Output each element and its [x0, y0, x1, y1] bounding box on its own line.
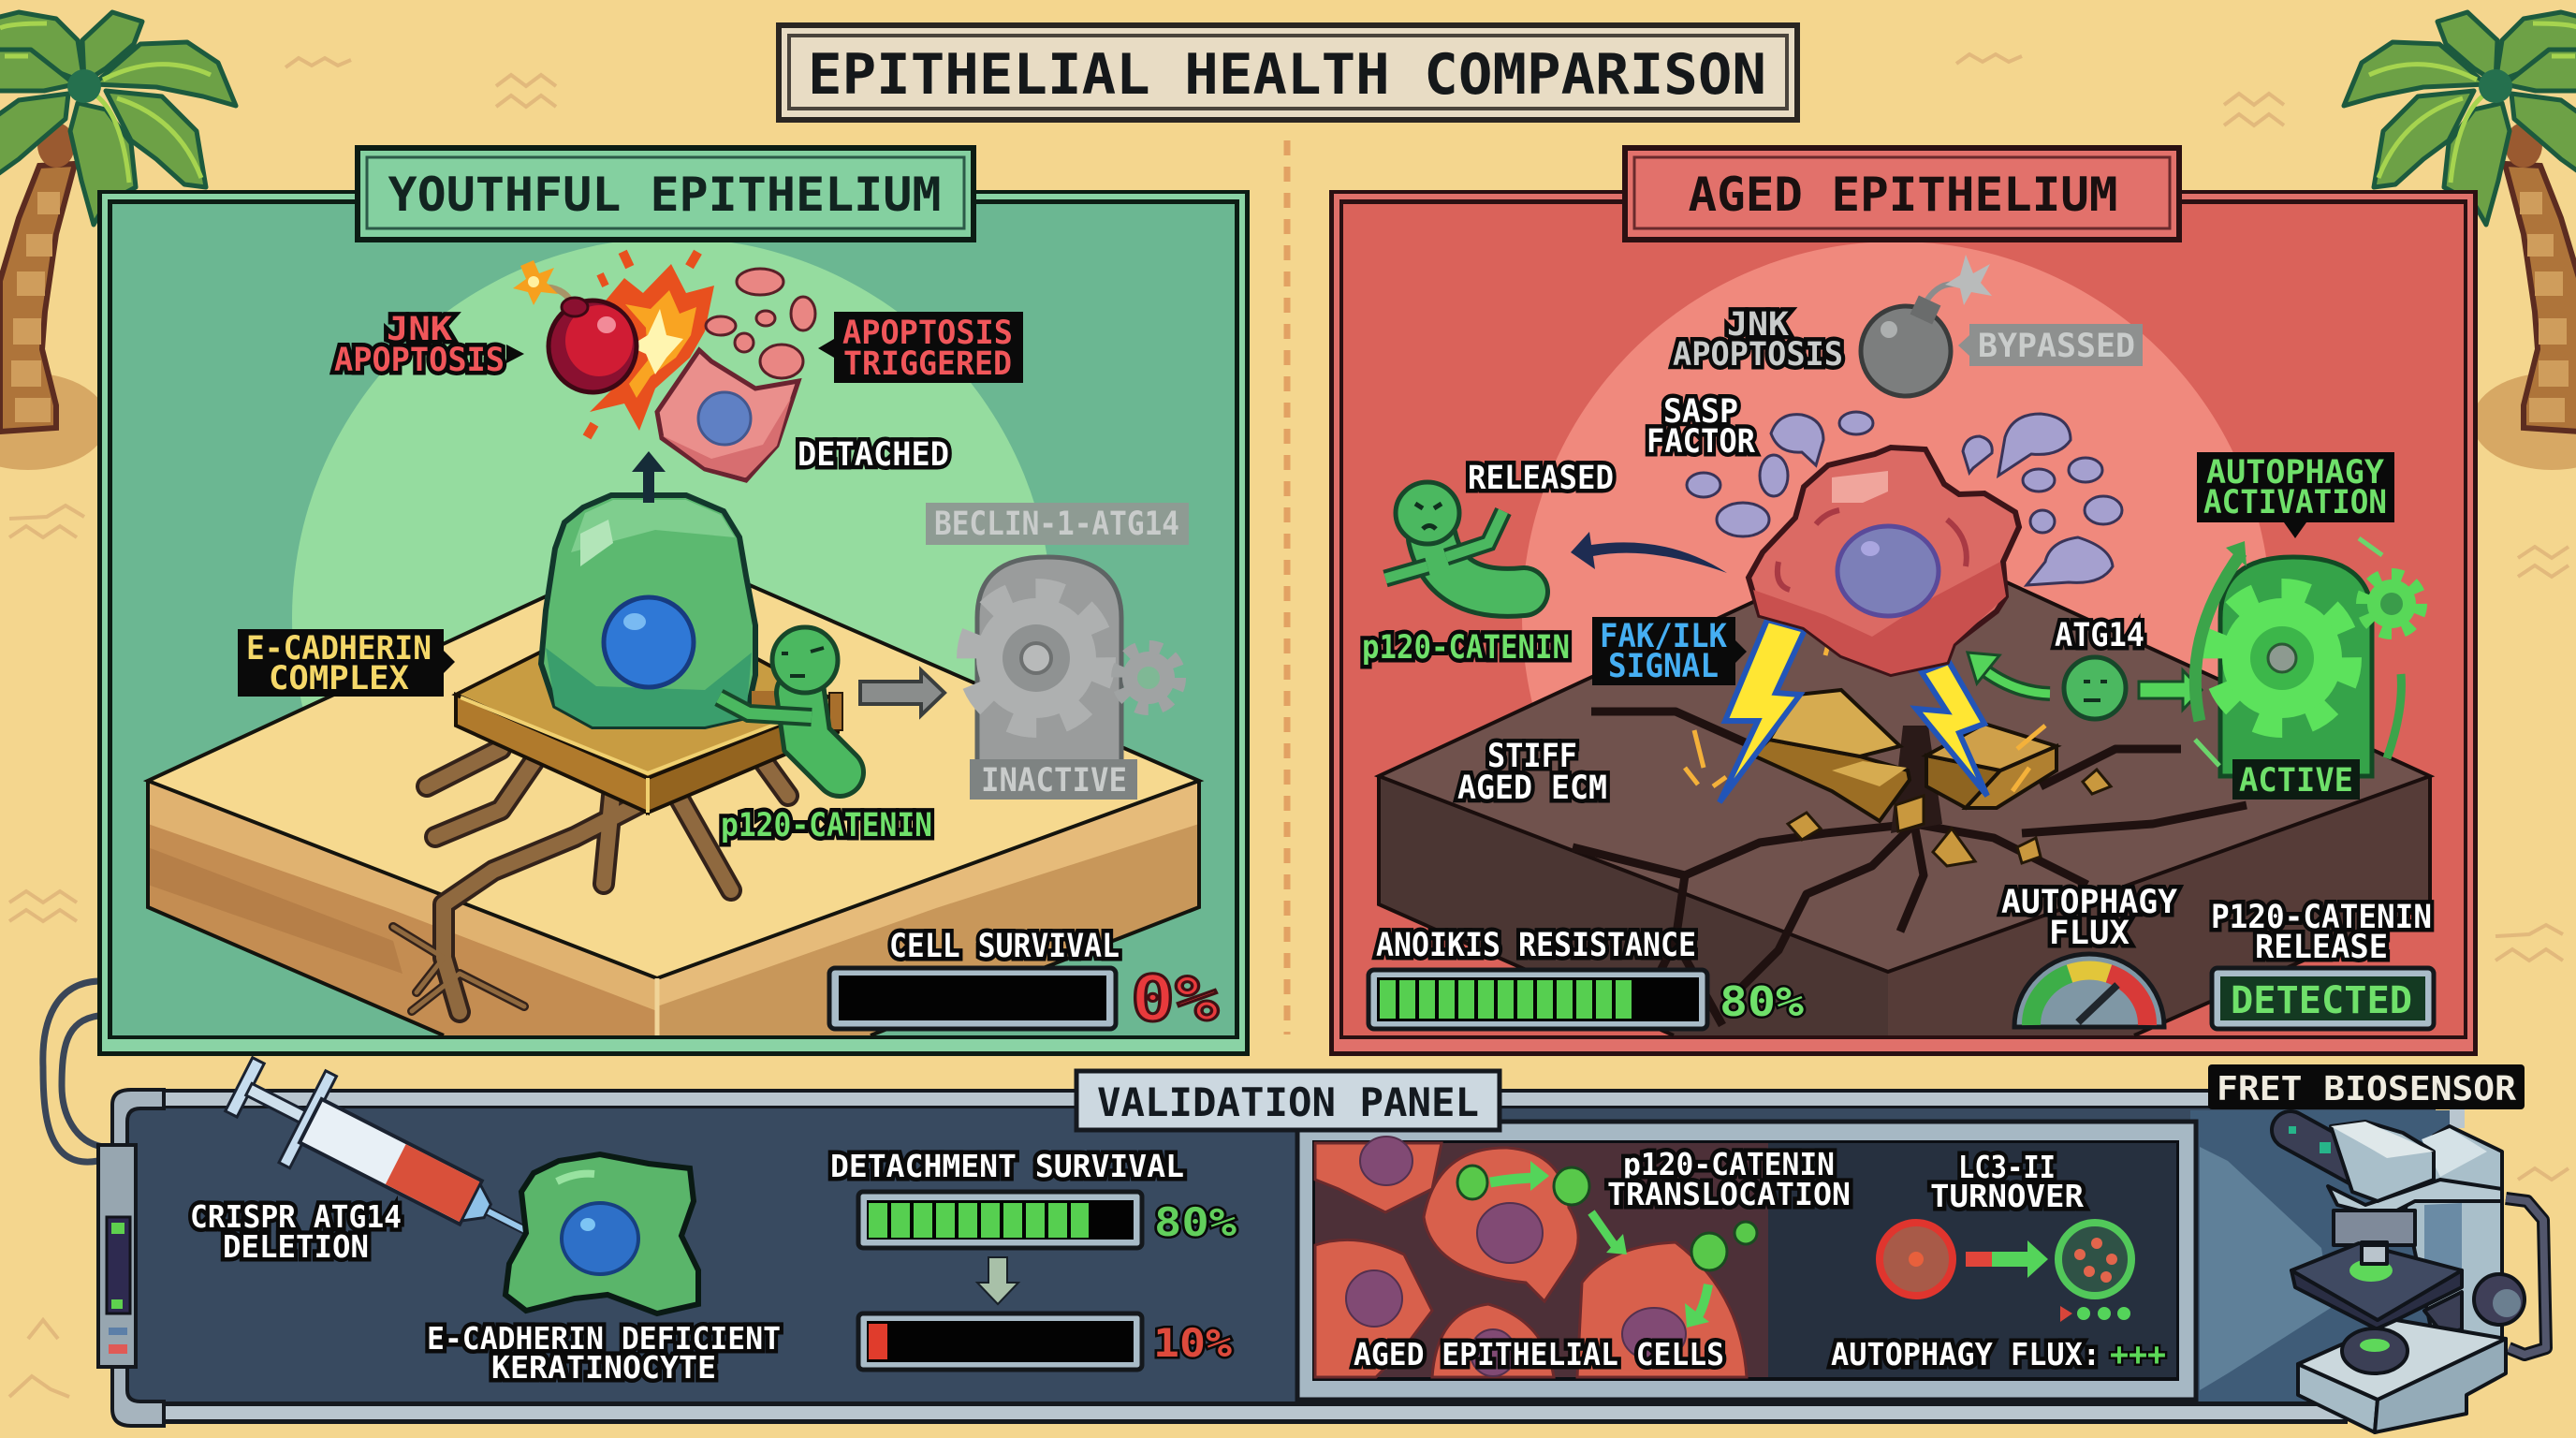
- aged red cell: [1749, 448, 2019, 674]
- SASP smoke clouds: [1687, 412, 2122, 585]
- label: autophagy activation: [2197, 452, 2394, 538]
- icon: right palm tree: [2344, 12, 2576, 470]
- labels inside window: p120-CATENIN: [1623, 1146, 1835, 1182]
- icon: syringe: [215, 1038, 563, 1284]
- arrow up: [632, 451, 666, 503]
- label: FAK/ILK signal: FAK/ILK: [1600, 618, 1727, 655]
- label: JNK apoptosis (grey): [1673, 306, 1843, 374]
- title: [779, 25, 1797, 120]
- label: e-cadherin complex: E-CADHERIN: [246, 630, 432, 668]
- label: inactive: INACTIVE: [981, 762, 1127, 800]
- cell survival meter: [829, 928, 1219, 1036]
- heading: youthful epithelium: [358, 148, 973, 240]
- p120-catenin release status: RELEASE: [2255, 929, 2388, 966]
- arrow: grey to machine: [860, 670, 944, 715]
- label: stiff aged ECM: AGED ECM: [1457, 770, 1607, 807]
- green keratinocyte cell: [505, 1154, 698, 1313]
- label: E-cadherin deficient keratinocyte: [427, 1320, 781, 1386]
- labels inside window: LC3-II: [1958, 1149, 2056, 1185]
- label: E-cadherin deficient keratinocyte: KERATINOCYTE: [491, 1349, 716, 1386]
- label: stiff aged ECM: STIFF: [1487, 738, 1577, 775]
- label: JNK apoptosis: [334, 311, 524, 379]
- p120-catenin release status: [2211, 899, 2434, 1029]
- bomb: [513, 260, 637, 392]
- p120-catenin character: [719, 627, 842, 772]
- right recess: [2190, 1110, 2452, 1402]
- sand block: [148, 545, 1199, 1035]
- autophagy flux gauge: [2001, 884, 2177, 1027]
- label: p120-catenin released: p120-CATENIN: [1362, 629, 1570, 667]
- aged cell micrograph: [1315, 1143, 1747, 1377]
- label: autophagy activation: ACTIVATION: [2203, 484, 2387, 521]
- glow circle: [292, 238, 1052, 998]
- label: stiff aged ECM: [1457, 738, 1607, 807]
- roots: [393, 749, 788, 1012]
- label: JNK apoptosis: JNK: [387, 311, 452, 348]
- broken gold platform: [1753, 690, 2111, 866]
- label: bypassed: BYPASSED: [1978, 328, 2135, 365]
- label: FRET biosensor: FRET BIOSENSOR: [2217, 1070, 2516, 1108]
- ATG14 character with arrows: [1968, 653, 2202, 719]
- autophagy flux gauge: AUTOPHAGY: [2001, 884, 2177, 921]
- frame bars: [112, 1089, 2465, 1426]
- label: JNK apoptosis (grey): JNK: [1727, 306, 1789, 344]
- side control unit: [98, 1145, 136, 1367]
- anoikis resistance meter: ANOIKIS RESISTANCE: [1376, 927, 1696, 964]
- label: E-cadherin deficient keratinocyte: E-CADHERIN DEFICIENT: [427, 1320, 781, 1357]
- autophagy flux gauge: FLUX: [2049, 915, 2130, 952]
- label: detached: DETACHED: [798, 436, 949, 474]
- label: CRISPR ATG14 deletion: DELETION: [223, 1228, 369, 1265]
- title: EPITHELIAL HEALTH COMPARISON: [808, 42, 1766, 108]
- detachment survival meters: DETACHMENT SURVIVAL: [830, 1148, 1184, 1184]
- p120-catenin release status: P120-CATENIN: [2211, 899, 2432, 936]
- p120-catenin release status: DETECTED: [2231, 979, 2412, 1022]
- cracks: [1573, 712, 2247, 1025]
- label: CRISPR ATG14 deletion: [190, 1198, 402, 1265]
- label: FAK/ILK signal: SIGNAL: [1608, 648, 1719, 685]
- panel: youthful epithelium: [97, 190, 1250, 1056]
- released p120-catenin character: [1385, 482, 1524, 593]
- glow circle: [1522, 242, 2271, 990]
- cell survival meter: 0%: [1131, 962, 1219, 1036]
- image window: [1297, 1122, 2196, 1400]
- label: e-cadherin complex: COMPLEX: [269, 660, 409, 697]
- label: Beclin-1-ATG14: BECLIN-1-ATG14: [934, 506, 1179, 543]
- detachment survival meters: [830, 1148, 1237, 1370]
- label: active: ACTIVE: [2239, 762, 2353, 800]
- heading: validation panel: VALIDATION PANEL: [1097, 1079, 1479, 1125]
- label: apoptosis triggered: TRIGGERED: [843, 345, 1012, 383]
- nucleus: [604, 597, 694, 687]
- labels inside window: TRANSLOCATION: [1607, 1176, 1851, 1212]
- explosion: [583, 250, 714, 439]
- label: autophagy activation: AUTOPHAGY: [2206, 454, 2384, 492]
- detachment survival meters: 80%: [1154, 1199, 1237, 1245]
- label: CRISPR ATG14 deletion: CRISPR ATG14: [190, 1198, 402, 1235]
- label: SASP factor: [1647, 393, 1756, 461]
- detachment survival meters: 10%: [1153, 1320, 1232, 1366]
- heading: youthful epithelium: YOUTHFUL EPITHELIUM: [388, 168, 942, 222]
- label: apoptosis triggered: [818, 312, 1023, 383]
- panel: aged epithelium: [1329, 190, 2478, 1056]
- active machine with gears: [2195, 538, 2421, 776]
- label: JNK apoptosis: APOPTOSIS: [334, 342, 505, 379]
- green cell: [541, 495, 755, 726]
- cables: left panel: [43, 981, 103, 1162]
- detached pink cell: [657, 269, 815, 480]
- gold platform: [456, 599, 838, 813]
- label: apoptosis triggered: APOPTOSIS: [842, 315, 1013, 352]
- labels inside window: +++: [2110, 1336, 2166, 1373]
- label: SASP factor: FACTOR: [1647, 423, 1756, 461]
- anoikis resistance meter: 80%: [1720, 978, 1805, 1026]
- labels inside window: [1354, 1146, 2166, 1373]
- lightning bolts: [1685, 599, 2045, 802]
- labels inside window: TURNOVER: [1930, 1178, 2084, 1214]
- icon: microscope: [2289, 1122, 2546, 1432]
- cell survival meter: CELL SURVIVAL: [889, 928, 1120, 965]
- icon: left palm tree: [0, 12, 236, 470]
- labels inside window: AUTOPHAGY FLUX:: [1831, 1336, 2100, 1372]
- label: ATG14: ATG14: [2055, 617, 2144, 654]
- centre divider: [1284, 140, 1290, 1034]
- labels inside window: AGED EPITHELIAL CELLS: [1354, 1336, 1724, 1372]
- panel: validation: [98, 1038, 2465, 1426]
- label: JNK apoptosis (grey): APOPTOSIS: [1673, 336, 1843, 374]
- label: FAK/ILK signal: [1592, 617, 1747, 685]
- heading: validation panel: [1076, 1071, 1500, 1130]
- grey bomb: [1861, 255, 1992, 396]
- stiff ECM block: [1379, 534, 2430, 1035]
- label: e-cadherin complex: [238, 629, 455, 697]
- LC3-II turnover: [1880, 1223, 2131, 1322]
- heading: aged epithelium: AGED EPITHELIUM: [1689, 168, 2117, 222]
- inactive machine with gears: [967, 557, 1179, 776]
- heading: aged epithelium: [1625, 148, 2179, 240]
- label: released: RELEASED: [1468, 460, 1614, 497]
- label: p120-catenin: p120-CATENIN: [721, 807, 932, 844]
- label: SASP factor: SASP: [1663, 393, 1738, 431]
- arrow: release: [1571, 532, 1727, 573]
- anoikis resistance meter: [1368, 927, 1805, 1029]
